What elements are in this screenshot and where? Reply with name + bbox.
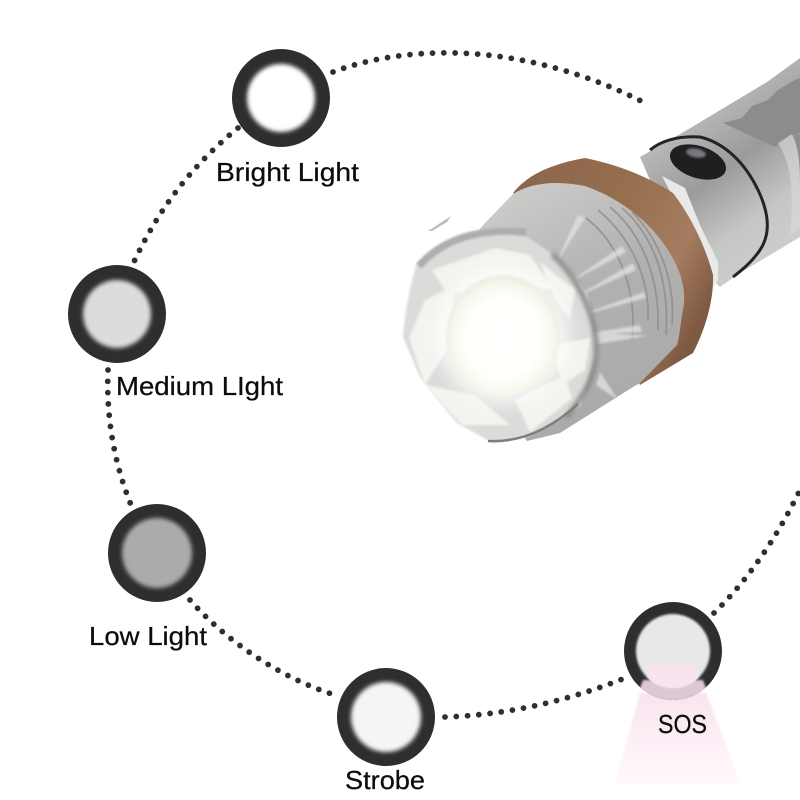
label: medium light: Medium LIght [116, 371, 284, 401]
flashlight handle [640, 58, 800, 287]
dotted arc connecting modes [108, 53, 800, 717]
black body ring [650, 137, 767, 277]
mode: strobe [337, 668, 435, 795]
reflector petals [409, 248, 590, 432]
indicator: sos [624, 602, 722, 704]
bezel rim [419, 231, 526, 266]
label: sos: SOS [658, 709, 707, 739]
small glint [428, 216, 451, 231]
label: bright light: Bright Light [216, 157, 360, 187]
handle grip texture [723, 78, 800, 147]
mode: low light [89, 504, 208, 651]
indicator: medium light [68, 265, 166, 363]
mode: bright light [216, 49, 360, 187]
brown ring [513, 158, 713, 385]
label: strobe: Strobe [345, 765, 425, 795]
indicator: bright light [232, 49, 330, 147]
collar highlight [662, 176, 718, 298]
head front face [403, 230, 597, 443]
lens glow [437, 268, 569, 404]
mode: medium light [68, 265, 284, 401]
mode: sos [620, 602, 734, 774]
head cone [420, 183, 684, 441]
label: low light: Low Light [89, 621, 208, 651]
flashlight illustration [403, 58, 800, 443]
lens [446, 275, 560, 397]
pink beam [615, 693, 741, 784]
indicator: strobe [337, 668, 435, 766]
push button [665, 138, 731, 186]
indicator: low light [108, 504, 206, 602]
light rays on head [555, 215, 648, 400]
thread ridges [586, 207, 672, 340]
